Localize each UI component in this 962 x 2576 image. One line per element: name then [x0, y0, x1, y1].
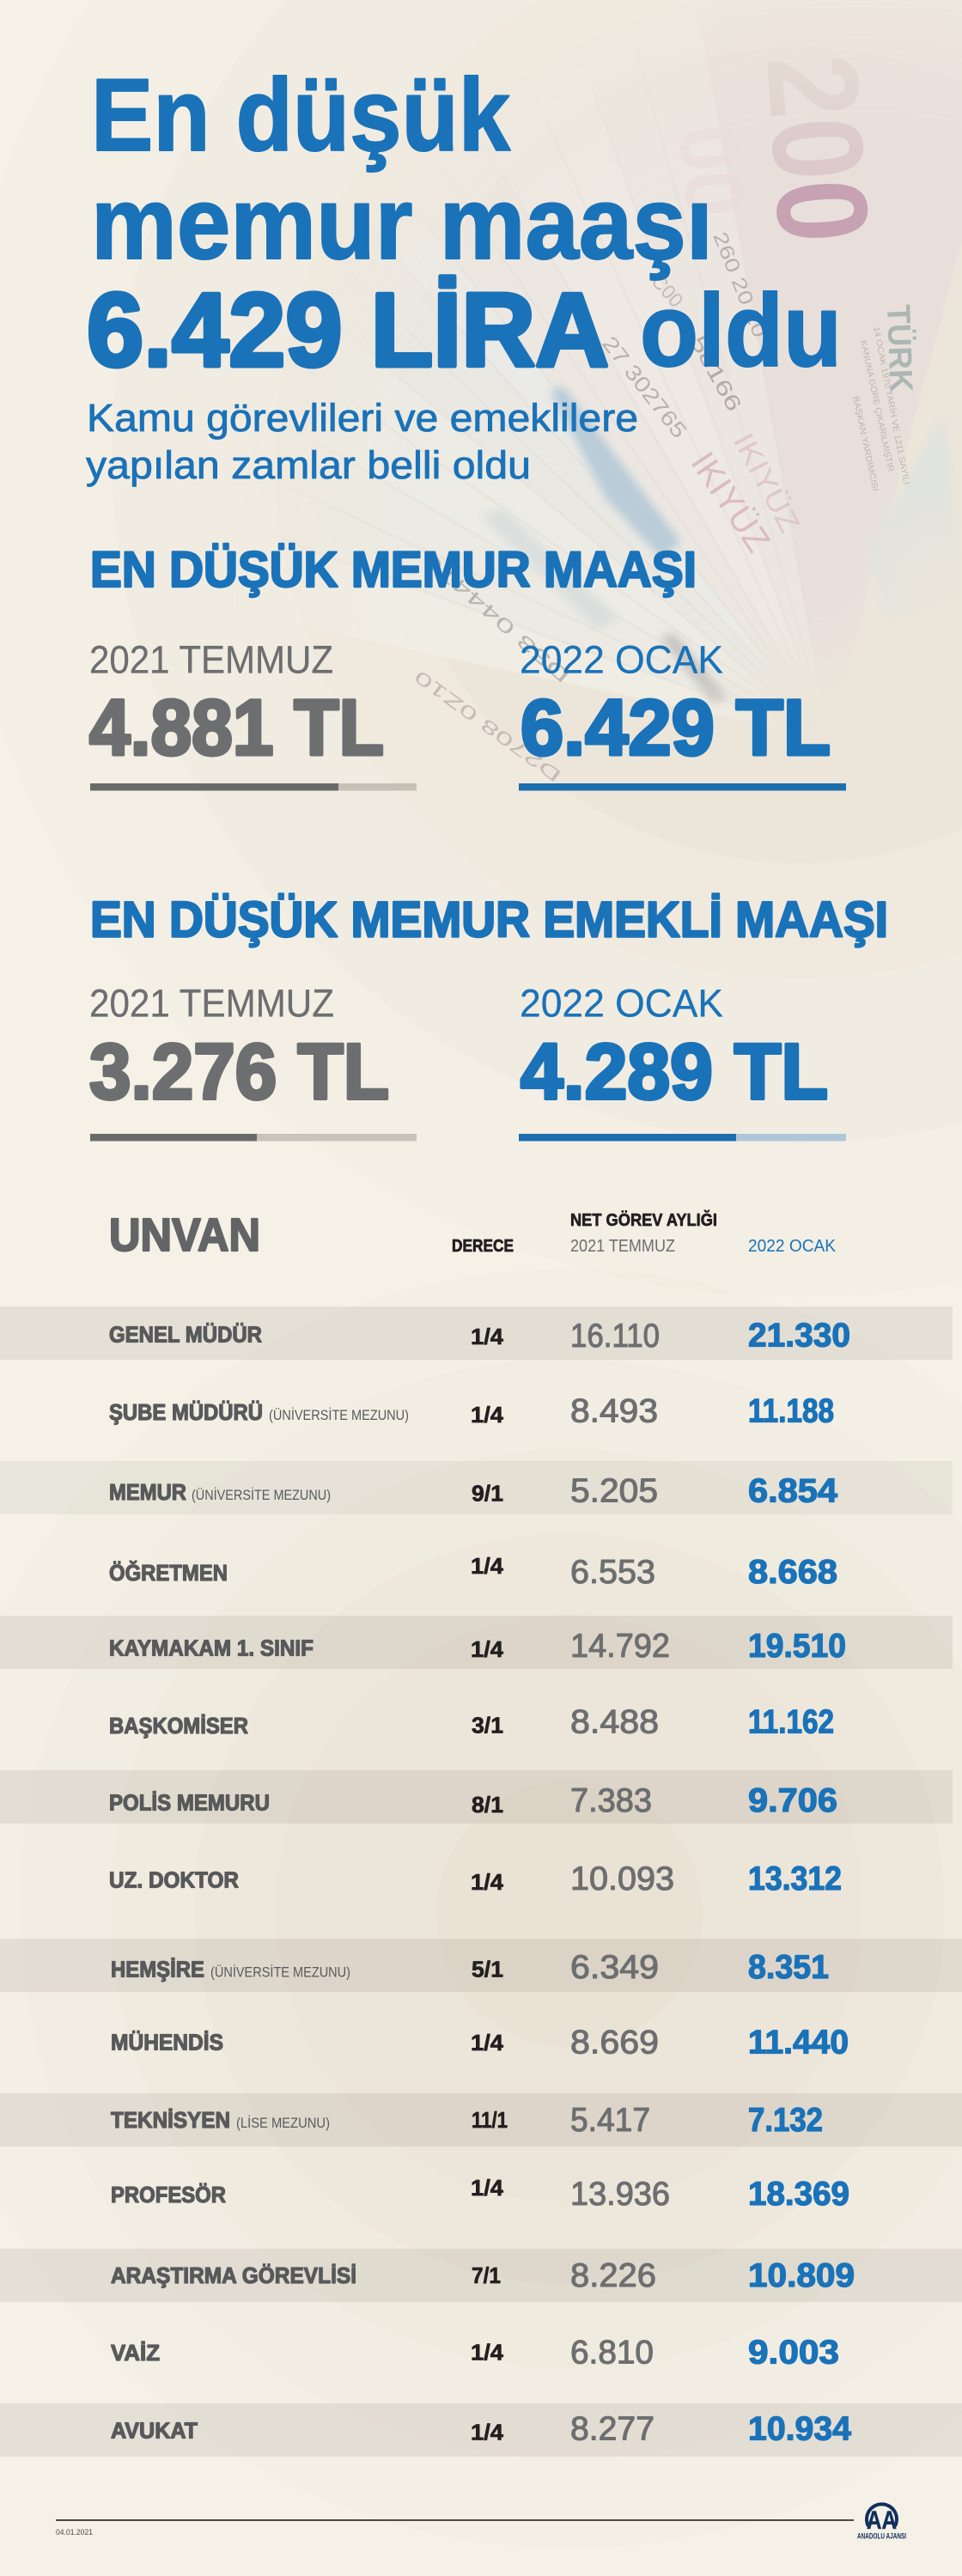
- row: mühendis: [111, 2025, 849, 2061]
- row: memur: [0, 1461, 953, 1514]
- panel: memur maaşı 2021 temmuz: 2021 TEMMUZ: [89, 637, 333, 682]
- date: 04.01.2021: [56, 2528, 93, 2536]
- row: öğretmen: 1/4: [471, 1553, 504, 1579]
- row: mühendis: 8.669: [570, 2025, 659, 2061]
- row: uz. doktor: 13.312: [748, 1860, 842, 1897]
- panel: emekli maaşı 2022 ocak: [519, 981, 846, 1141]
- row: teknisyen: 11/1: [472, 2107, 508, 2133]
- table header: 2022 OCAK: [748, 1237, 837, 1256]
- row: profesör: 1/4: [471, 2175, 504, 2201]
- heading: en düşük memur emekli maaşı: EN DÜŞÜK MEMUR EMEKLİ MAAŞI: [90, 892, 888, 948]
- row: mühendis: 11.440: [748, 2025, 849, 2061]
- panel: memur maaşı 2021 temmuz: 4.881 TL: [89, 685, 384, 772]
- background photo: fan of banknotes: 14 OCAK 1970 TARİH VE 1211 SAYILI: [871, 326, 912, 485]
- table header: UNVAN: [109, 1209, 260, 1261]
- row: uz. doktor: UZ. DOKTOR: [109, 1869, 239, 1893]
- banknote denomination 200: 200: [740, 51, 897, 247]
- background photo: fan of banknotes: IKIYÜZ: [684, 445, 777, 559]
- row: avukat: 8.277: [570, 2411, 655, 2448]
- row: polis memuru: 8/1: [472, 1792, 503, 1818]
- row: avukat: [0, 2403, 962, 2457]
- row: şube müdürü: 8.493: [570, 1393, 658, 1430]
- logo: anadolu ajansi: ANADOLU AJANSI: [857, 2531, 906, 2541]
- panel: memur maaşı 2022 ocak: 6.429 TL: [521, 685, 831, 772]
- row: genel müdür: 21.330: [748, 1318, 850, 1355]
- row: teknisyen: [0, 2093, 962, 2147]
- row: profesör: [111, 2175, 849, 2213]
- row: şube müdürü: (ÜNİVERSİTE MEZUNU): [269, 1407, 409, 1423]
- background photo: fan of banknotes: D53 044470: [418, 548, 574, 687]
- panel: emekli maaşı 2022 ocak: 4.289 TL: [521, 1028, 828, 1116]
- row: uz. doktor: 10.093: [570, 1860, 674, 1897]
- background photo: fan of banknotes: BAŞKAN YARDIMCISI: [850, 395, 880, 492]
- row: şube müdürü: [109, 1393, 834, 1430]
- table header: NET GÖREV AYLIĞI: [570, 1209, 717, 1230]
- row: memur: 6.854: [748, 1472, 837, 1509]
- row: hemşire: 8.351: [748, 1949, 829, 1986]
- row: araştırma görevlisi: [0, 2249, 962, 2302]
- row: profesör: 13.936: [570, 2176, 670, 2213]
- row: teknisyen: TEKNİSYEN: [111, 2109, 230, 2133]
- row: genel müdür: [0, 1306, 953, 1360]
- row: uz. doktor: [109, 1860, 842, 1897]
- table header: [109, 1209, 837, 1261]
- row: başkomiser: 3/1: [472, 1713, 503, 1739]
- progress bar: [519, 1134, 846, 1141]
- row: memur: (ÜNİVERSİTE MEZUNU): [192, 1487, 331, 1503]
- row: hemşire: HEMŞİRE: [111, 1958, 204, 1982]
- progress bar: [90, 783, 417, 790]
- row: vaiz: 1/4: [471, 2340, 504, 2366]
- row: kaymakam 1. sınıf: 19.510: [748, 1628, 846, 1665]
- panel: emekli maaşı 2021 temmuz: [89, 981, 417, 1141]
- panel: memur maaşı 2021 temmuz: [89, 637, 417, 790]
- row: polis memuru: [0, 1770, 953, 1824]
- row: memur: MEMUR: [109, 1481, 186, 1505]
- logo: anadolu ajansi: AA: [867, 2506, 897, 2535]
- row: avukat: 10.934: [748, 2411, 851, 2448]
- background photo: fan of banknotes: D2708 0Z10: [411, 666, 565, 786]
- progress bar: [90, 1134, 417, 1141]
- row: polis memuru: 9.706: [748, 1782, 837, 1819]
- progress bar: [519, 783, 846, 790]
- background photo: fan of banknotes: 260 20 20: [709, 228, 771, 340]
- row: öğretmen: ÖĞRETMEN: [109, 1561, 228, 1586]
- row: hemşire: (ÜNİVERSİTE MEZUNU): [210, 1964, 350, 1981]
- background photo: fan of banknotes: 00: [661, 121, 761, 221]
- row: kaymakam 1. sınıf: 14.792: [570, 1628, 670, 1665]
- row: mühendis: 1/4: [471, 2030, 504, 2055]
- subtitle: yapılan zamlar belli oldu: [86, 443, 531, 487]
- background photo: fan of banknotes: [391, 58, 950, 782]
- row: öğretmen: [109, 1553, 837, 1591]
- footer rule: [56, 2519, 854, 2521]
- row: kaymakam 1. sınıf: KAYMAKAM 1. SINIF: [109, 1637, 314, 1661]
- subtitle: Kamu görevlileri ve emeklilere: [87, 396, 638, 440]
- row: genel müdür: GENEL MÜDÜR: [109, 1323, 262, 1348]
- row: başkomiser: 8.488: [570, 1704, 659, 1741]
- row: başkomiser: BAŞKOMİSER: [109, 1714, 248, 1739]
- row: teknisyen: 5.417: [570, 2102, 650, 2139]
- row: kaymakam 1. sınıf: 1/4: [471, 1636, 504, 1662]
- panel: emekli maaşı 2021 temmuz: 2021 TEMMUZ: [89, 981, 334, 1026]
- subtitle: [86, 396, 638, 487]
- title: [87, 58, 842, 388]
- panel: emekli maaşı 2022 ocak: 2022 OCAK: [520, 981, 723, 1026]
- title line 1: En düşük: [91, 58, 510, 173]
- row: teknisyen: (LİSE MEZUNU): [236, 2115, 330, 2131]
- row: profesör: PROFESÖR: [111, 2183, 226, 2208]
- row: araştırma görevlisi: ARAŞTIRMA GÖREVLİSİ: [111, 2263, 356, 2288]
- row: avukat: 1/4: [471, 2420, 504, 2445]
- table: [0, 1306, 962, 2457]
- row: şube müdürü: 1/4: [471, 1402, 504, 1428]
- row: memur: 9/1: [472, 1481, 503, 1507]
- row: şube müdürü: 11.188: [748, 1393, 834, 1430]
- row: vaiz: VAİZ: [111, 2342, 160, 2366]
- row: vaiz: [111, 2335, 839, 2372]
- row: hemşire: 6.349: [570, 1949, 659, 1986]
- table header: 2021 TEMMUZ: [570, 1237, 675, 1256]
- row: hemşire: [0, 1939, 962, 1992]
- panel: emekli maaşı 2021 temmuz: 3.276 TL: [89, 1028, 389, 1116]
- logo: anadolu ajansi: [857, 2504, 906, 2541]
- row: kaymakam 1. sınıf: [0, 1616, 953, 1669]
- background photo: fan of banknotes: TÜRK: [880, 304, 920, 393]
- row: başkomiser: 11.162: [748, 1704, 834, 1741]
- heading: en düşük memur maaşı: EN DÜŞÜK MEMUR MAAŞI: [90, 542, 697, 598]
- panel: memur maaşı 2022 ocak: [519, 637, 846, 790]
- row: polis memuru: POLİS MEMURU: [109, 1792, 270, 1816]
- row: hemşire: 5/1: [472, 1957, 503, 1982]
- title line 3: oldu: [640, 273, 842, 388]
- row: araştırma görevlisi: 7/1: [472, 2262, 501, 2288]
- background photo: fan of banknotes: 58166: [685, 332, 746, 416]
- background photo: fan of banknotes: C00: [647, 270, 688, 312]
- row: başkomiser: [109, 1704, 834, 1741]
- row: memur: 5.205: [570, 1472, 658, 1509]
- row: öğretmen: 6.553: [570, 1554, 655, 1591]
- row: teknisyen: 7.132: [748, 2102, 823, 2139]
- row: şube müdürü: ŞUBE MÜDÜRÜ: [109, 1400, 263, 1425]
- panel: memur maaşı 2022 ocak: 2022 OCAK: [520, 637, 723, 682]
- background photo: fan of banknotes: 27 302765: [597, 332, 691, 443]
- row: genel müdür: 16.110: [570, 1318, 660, 1355]
- row: profesör: 18.369: [748, 2176, 849, 2213]
- row: mühendis: MÜHENDİS: [111, 2031, 223, 2055]
- row: polis memuru: 7.383: [570, 1782, 652, 1819]
- background photo: fan of banknotes: KANUNA GÖRE ÇIKARILMIŞTIR: [858, 339, 896, 472]
- background photo: fan of banknotes: IKIYÜZ: [727, 428, 806, 538]
- table header: DERECE: [452, 1237, 514, 1256]
- title line 3: 6.429 LİRA: [87, 271, 609, 388]
- row: vaiz: 9.003: [748, 2335, 839, 2372]
- row: vaiz: 6.810: [570, 2335, 654, 2372]
- row: öğretmen: 8.668: [748, 1554, 837, 1591]
- row: genel müdür: 1/4: [471, 1324, 504, 1349]
- title line 2: memur maaşı: [91, 166, 713, 281]
- row: uz. doktor: 1/4: [471, 1869, 504, 1895]
- row: araştırma görevlisi: 8.226: [570, 2257, 656, 2294]
- row: avukat: AVUKAT: [111, 2420, 198, 2444]
- row: araştırma görevlisi: 10.809: [748, 2257, 855, 2294]
